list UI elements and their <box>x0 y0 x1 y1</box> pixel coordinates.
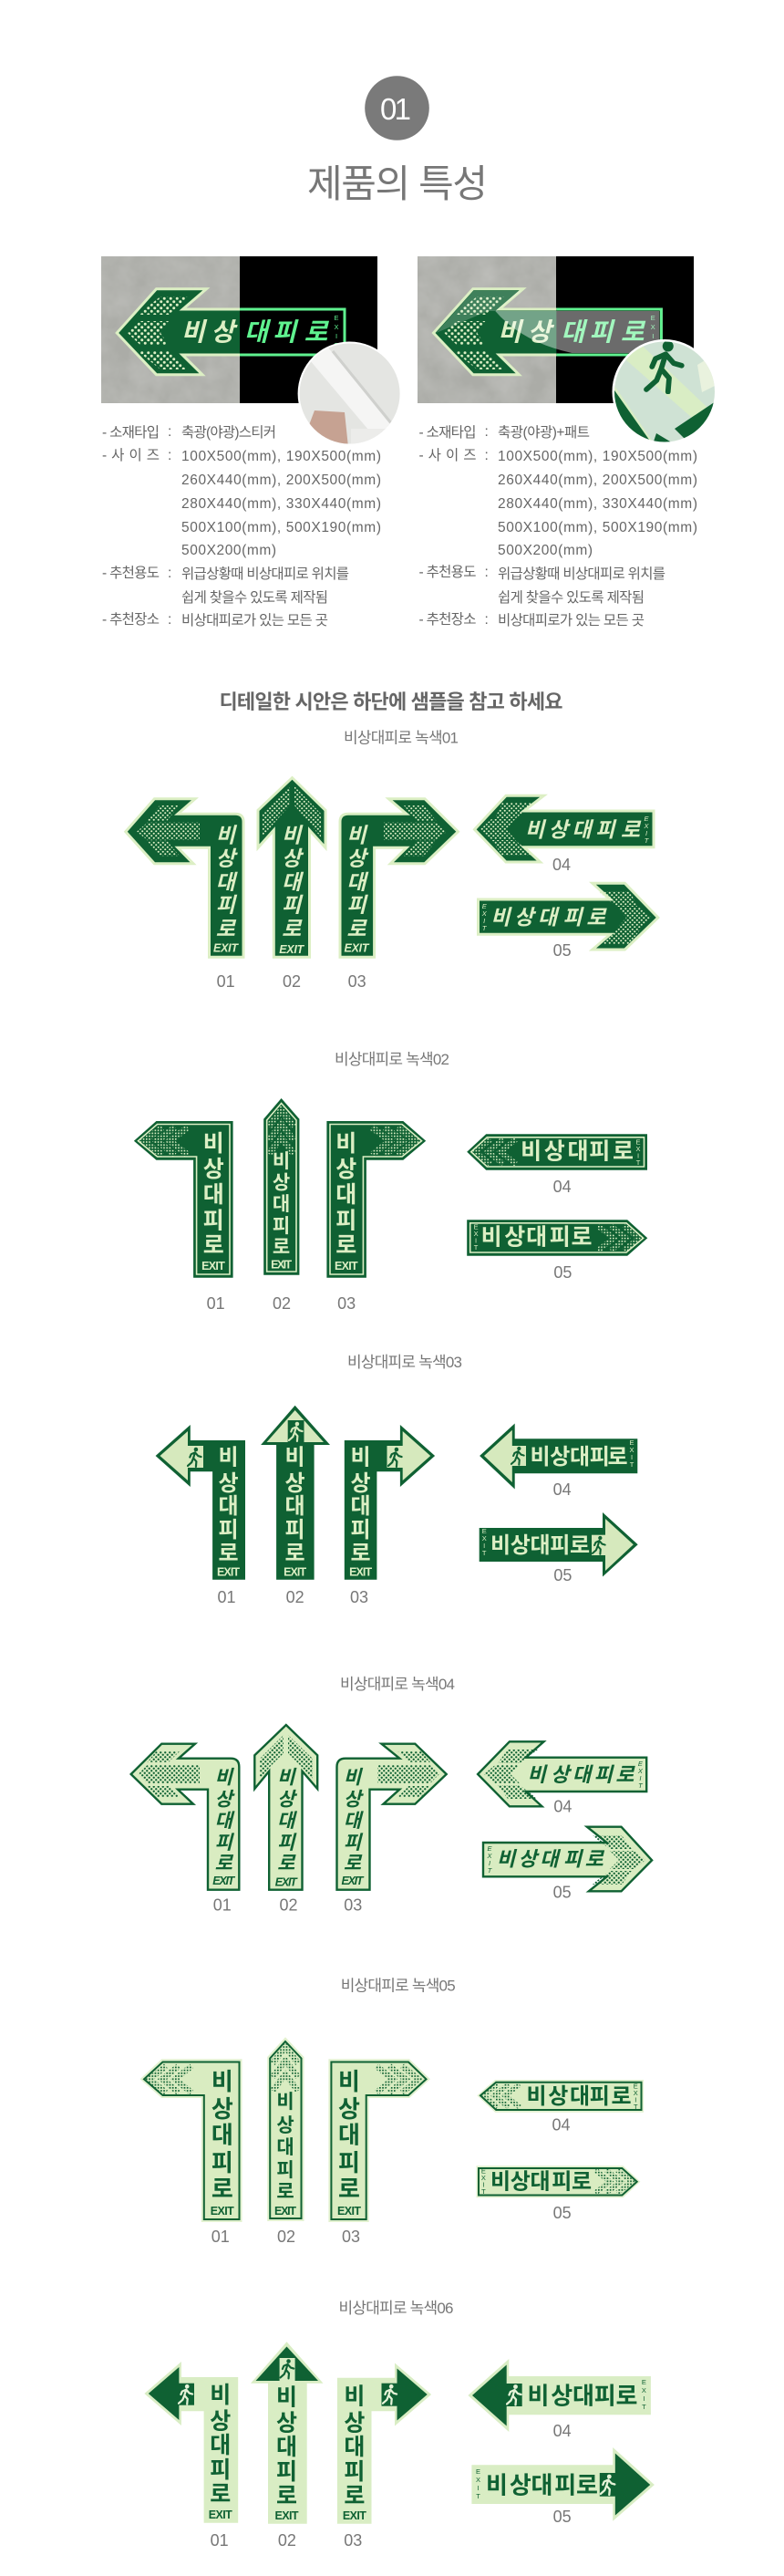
sign 04 left <box>477 2080 644 2113</box>
sign 03 right turn <box>337 2363 431 2524</box>
spec list: left: : <box>168 612 171 628</box>
panel: PET product <box>418 256 720 447</box>
sign 02 up: 비상대피로 <box>282 823 304 940</box>
sign 04 left: EXIT <box>629 1439 634 1469</box>
size labels: 01 <box>217 1588 236 1606</box>
size labels: 04 <box>552 2116 571 2135</box>
size labels: 03 <box>337 1294 356 1313</box>
spec list: right: 100X500(mm), 190X500(mm) <box>498 449 697 464</box>
section: green 01 <box>126 730 658 991</box>
sign 02 up <box>267 2037 304 2221</box>
sign 04 left: EXIT <box>634 2082 638 2111</box>
sign 03 right turn: EXIT <box>335 1260 358 1272</box>
sign 02 up <box>263 1098 299 1275</box>
size labels: 05 <box>553 1883 572 1901</box>
sign 01 left turn: EXIT <box>212 1875 236 1887</box>
sign 05 right: EXIT <box>482 1527 487 1557</box>
size labels <box>211 2422 572 2550</box>
sign 01 left turn: 비상대피로 <box>203 1131 224 1259</box>
sign 02 up: EXIT <box>275 1875 298 1888</box>
size labels <box>207 1178 572 1313</box>
sign 02 up: 비상대피로 <box>276 2092 294 2202</box>
sign 05 right <box>467 1220 647 1256</box>
sign 01 left turn: 비상대피로 <box>218 1445 239 1565</box>
sign 01 left turn <box>131 1744 239 1890</box>
sign 01 left turn: 비상대피로 <box>211 2068 233 2202</box>
sign 05 right: EXIT <box>486 1844 493 1875</box>
spec list: right: : <box>485 424 489 440</box>
size labels: 02 <box>279 1896 298 1914</box>
spec list: right: : <box>485 612 489 628</box>
spec list: right: - 사 이 즈 <box>419 447 476 463</box>
size labels: 03 <box>348 972 366 991</box>
arrow sign: glossy: 비상 <box>498 317 555 347</box>
sign 03 right turn <box>340 799 458 957</box>
size labels <box>217 856 572 991</box>
spec list: left: 축광(야광)스티커 <box>181 424 276 441</box>
arrow sign: day and glow: EXIT <box>334 314 339 349</box>
section title: 비상대피로 녹색02 <box>335 1051 449 1068</box>
sign 02 up <box>258 778 325 957</box>
sign 02 up: EXIT <box>271 1259 292 1272</box>
sign 03 right turn: 비상대피로 <box>344 1768 365 1874</box>
sign 05 right: EXIT <box>476 2467 480 2500</box>
size labels: 02 <box>277 2228 295 2246</box>
size labels: 01 <box>207 1294 225 1313</box>
spec list: right: 500X200(mm) <box>498 543 593 558</box>
sign 01 left turn: EXIT <box>217 1565 240 1578</box>
sign 03 right turn <box>337 1744 447 1890</box>
size labels: 05 <box>553 1263 572 1282</box>
spec list: left: - 추천장소 <box>102 611 160 628</box>
sign 05 right <box>483 1827 652 1891</box>
sign 03 right turn: EXIT <box>349 1565 372 1578</box>
sign 02 up <box>251 2342 323 2524</box>
sign 03 right turn: 비상대피로 <box>346 823 369 940</box>
sign 03 right turn: EXIT <box>345 941 370 954</box>
spec list: left: 260X440(mm), 200X500(mm) <box>181 473 381 488</box>
subheading: 디테일한 시안은 하단에 샘플을 참고 하세요 <box>219 691 563 713</box>
sign 04 left <box>478 1741 646 1806</box>
size labels: 03 <box>342 2228 360 2246</box>
spec list: right: - 추천용도 <box>419 564 476 580</box>
arrow sign: day and glow: 비상 <box>181 317 238 347</box>
section title: 비상대피로 녹색05 <box>341 1978 456 1995</box>
sign 02 up: 비상대피로 <box>276 2384 297 2508</box>
spec list: left: 500X200(mm) <box>181 543 276 558</box>
spec list: right <box>419 424 697 628</box>
sign 01 left turn <box>156 1425 245 1580</box>
arrow sign: glossy: EXIT <box>651 314 655 349</box>
sign 04 left: 비상대피로 <box>527 2084 632 2109</box>
photo: concrete and dark split background <box>101 256 377 403</box>
section title: 비상대피로 녹색04 <box>340 1676 455 1693</box>
spec list: left: - 추천용도 <box>102 565 160 581</box>
arrow sign: day and glow: 대피로 <box>244 317 330 347</box>
sign 03 right turn: EXIT <box>343 2509 366 2522</box>
sign 05 right: 비상대피로 <box>490 1533 590 1558</box>
size labels: 01 <box>211 2531 229 2550</box>
sign 02 up: EXIT <box>284 1565 306 1578</box>
sign 01 left turn <box>144 2362 238 2523</box>
sign 02 up <box>261 1406 330 1580</box>
sign 01 left turn <box>134 1121 233 1278</box>
sign 03 right turn: 비상대피로 <box>335 1131 356 1259</box>
spec list: left: : <box>168 448 171 463</box>
spec list: left: 500X100(mm), 500X190(mm) <box>181 520 381 535</box>
sign 01 left turn: 비상대피로 <box>215 1768 236 1874</box>
spec list: right: 쉽게 찾을수 있도록 제작됨 <box>498 589 645 606</box>
section: green 06 <box>144 2300 655 2550</box>
spec list: right: : <box>485 448 489 463</box>
sign 04 left <box>467 1134 647 1170</box>
sign 01 left turn: EXIT <box>209 2508 232 2521</box>
sign 02 up: EXIT <box>274 2205 296 2218</box>
size labels: 02 <box>273 1294 291 1313</box>
spec list: left: 쉽게 찾을수 있도록 제작됨 <box>181 589 328 606</box>
sign 05 right: 비상대피로 <box>481 1225 593 1251</box>
spec list: right: 위급상황때 비상대피로 위치를 <box>498 566 665 582</box>
number badge <box>365 76 429 140</box>
sign 01 left turn: EXIT <box>201 1260 225 1272</box>
size labels: 02 <box>283 972 301 991</box>
section: green 02 <box>134 1051 647 1313</box>
sign 04 left: 비상대피로 <box>530 1445 628 1470</box>
size labels: 04 <box>553 2422 572 2440</box>
size labels: 03 <box>344 1896 362 1914</box>
sign 04 left: EXIT <box>643 815 650 845</box>
spec list: right: 축광(야광)+패트 <box>498 424 590 441</box>
size labels: 01 <box>213 1896 232 1914</box>
sign 03 right turn: 비상대피로 <box>351 1445 371 1565</box>
sign 02 up: 비상대피로 <box>285 1445 305 1565</box>
spec list: left: - 소재타입 <box>102 424 160 441</box>
sign 03 right turn: EXIT <box>337 2205 361 2218</box>
sign 02 up: 비상대피로 <box>273 1151 290 1258</box>
size labels: 01 <box>217 972 235 991</box>
sign 05 right <box>476 2166 640 2197</box>
size labels: 03 <box>350 1588 368 1606</box>
sign 02 up: EXIT <box>275 2509 299 2522</box>
sign 05 right: 비상대피로 <box>497 1848 605 1871</box>
spec list: left: 280X440(mm), 330X440(mm) <box>181 496 381 512</box>
sign 04 left: 비상대피로 <box>521 1139 634 1165</box>
sign 03 right turn: 비상대피로 <box>344 2384 365 2508</box>
spec list: left: - 사 이 즈 <box>102 447 160 463</box>
sign 05 right: EXIT <box>481 2167 486 2196</box>
spec list: right: 비상대피로가 있는 모든 곳 <box>498 612 645 628</box>
section title: 비상대피로 녹색01 <box>344 730 459 746</box>
sign 04 left <box>475 795 654 862</box>
sign 02 up: EXIT <box>279 943 305 956</box>
sign 05 right <box>478 883 658 950</box>
arrow sign: glossy <box>434 289 662 375</box>
size labels: 01 <box>211 2228 230 2246</box>
sign 03 right turn <box>328 2059 430 2222</box>
size labels <box>211 2116 572 2246</box>
inset: PET sign detail <box>613 339 715 441</box>
spec list: right: : <box>485 565 489 580</box>
spec list: left: : <box>168 424 171 440</box>
sign 04 left <box>468 2359 651 2432</box>
spec list: left: 위급상황때 비상대피로 위치를 <box>181 566 349 582</box>
size labels: 03 <box>344 2531 362 2550</box>
size labels: 05 <box>553 941 572 960</box>
spec list: right: - 소재타입 <box>419 424 476 441</box>
spec list: right: 500X100(mm), 500X190(mm) <box>498 520 697 535</box>
sign 01 left turn: 비상대피로 <box>210 2383 231 2507</box>
section title: 비상대피로 녹색03 <box>347 1354 462 1371</box>
sign 01 left turn: EXIT <box>213 941 239 954</box>
size labels <box>217 1480 572 1606</box>
sign 03 right turn: 비상대피로 <box>338 2068 360 2202</box>
photo: concrete and dark split background <box>418 256 694 403</box>
spec list: right: 280X440(mm), 330X440(mm) <box>498 496 697 512</box>
size labels <box>213 1797 572 1914</box>
number badge: 01 <box>380 92 411 126</box>
sign 04 left <box>480 1423 637 1489</box>
size labels: 04 <box>553 1178 572 1196</box>
sign 05 right: 비상대피로 <box>490 2169 592 2195</box>
sign 01 left turn <box>140 2059 242 2222</box>
panel: sticker product <box>101 256 406 447</box>
spec list: left: 100X500(mm), 190X500(mm) <box>181 449 381 464</box>
sign 05 right: 비상대피로 <box>490 905 607 929</box>
sign 04 left: 비상대피로 <box>527 1763 635 1786</box>
section: green 05 <box>140 1978 644 2246</box>
sign 04 left: 비상대피로 <box>528 2383 637 2410</box>
size labels: 02 <box>278 2531 296 2550</box>
arrow sign: glossy: 대피로 <box>561 317 646 347</box>
section title: 비상대피로 녹색06 <box>339 2300 454 2317</box>
section: green 04 <box>131 1676 652 1914</box>
sign 01 left turn: EXIT <box>211 2205 234 2218</box>
size labels: 04 <box>553 1797 572 1815</box>
sign 04 left: EXIT <box>637 1760 644 1790</box>
size labels: 02 <box>286 1588 304 1606</box>
sign 01 left turn <box>126 799 243 957</box>
size labels: 04 <box>552 856 571 874</box>
sign 05 right: EXIT <box>481 902 488 932</box>
title: 제품의 특성 <box>307 162 488 205</box>
sign 01 left turn: 비상대피로 <box>216 823 239 940</box>
size labels: 05 <box>553 2508 572 2526</box>
sign 02 up: 비상대피로 <box>277 1768 298 1874</box>
sign 04 left: 비상대피로 <box>525 817 642 841</box>
spec list: left: 비상대피로가 있는 모든 곳 <box>181 612 328 628</box>
sign 04 left: EXIT <box>642 2378 646 2411</box>
sign 05 right <box>471 2447 655 2521</box>
sign 03 right turn <box>345 1425 435 1580</box>
sign 03 right turn: EXIT <box>341 1875 365 1887</box>
sign 02 up <box>254 1725 317 1890</box>
inset: sticker film detail <box>296 341 406 447</box>
sign 05 right <box>480 1512 638 1576</box>
size labels: 05 <box>553 2204 572 2222</box>
section: green 03 <box>156 1354 638 1606</box>
sign 03 right turn <box>326 1121 426 1278</box>
spec list: left <box>102 424 381 628</box>
spec list: left: : <box>168 566 171 581</box>
sign 04 left: EXIT <box>635 1138 641 1167</box>
sign 05 right: EXIT <box>474 1222 479 1252</box>
size labels: 05 <box>553 1566 572 1584</box>
sign 05 right: 비상대피로 <box>486 2472 598 2499</box>
size labels: 04 <box>553 1480 572 1499</box>
arrow sign: day and glow <box>117 289 346 375</box>
spec list: right: - 추천장소 <box>419 611 476 628</box>
spec list: right: 260X440(mm), 200X500(mm) <box>498 473 697 488</box>
